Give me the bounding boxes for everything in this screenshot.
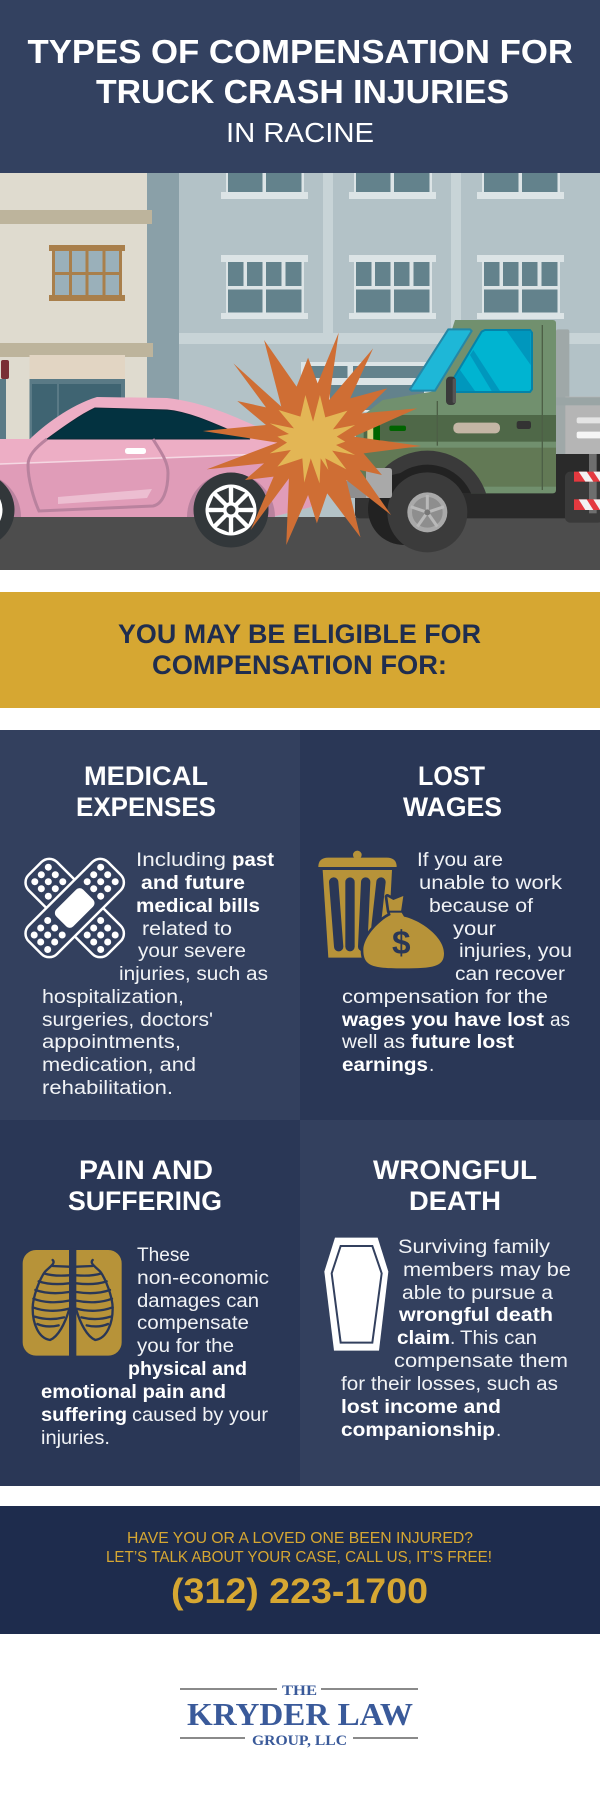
body text: wrongful death: compensate them [394, 1351, 568, 1372]
heading: lost wages: WAGES [403, 792, 502, 822]
title line two: TRUCK CRASH INJURIES [96, 73, 509, 110]
heading: lost wages [403, 761, 502, 822]
body text: pain and suffering: caused by your [132, 1405, 269, 1426]
body text: wrongful death: wrongful death [398, 1305, 553, 1326]
heading: medical expenses: EXPENSES [76, 792, 216, 822]
body text: lost wages: unable to work [419, 873, 563, 894]
logo: The Kryder Law Group: THE [282, 1683, 317, 1699]
eligibility banner [0, 592, 600, 708]
body text: wrongful death: companionship [341, 1420, 495, 1441]
heading: lost wages: LOST [418, 761, 485, 791]
pink car [0, 397, 320, 548]
background buildings [0, 173, 600, 518]
panel: pain and suffering [0, 1120, 300, 1486]
body text: medical expenses: surgeries, doctors' [42, 1010, 213, 1031]
heading: medical expenses: MEDICAL [84, 761, 208, 791]
green truck [355, 320, 600, 574]
heading: medical expenses [76, 761, 216, 822]
panel: lost wages [300, 730, 600, 1120]
heading: pain and suffering: SUFFERING [68, 1186, 222, 1216]
body text: wrongful death [341, 1237, 571, 1441]
banner line one: YOU MAY BE ELIGIBLE FOR [118, 619, 481, 649]
body text: medical expenses: related to [142, 919, 232, 940]
body text: wrongful death: Surviving family [398, 1237, 551, 1258]
call to action text [106, 1530, 492, 1566]
body text: pain and suffering: suffering [41, 1405, 127, 1426]
subtitle: IN RACINE [226, 117, 374, 148]
body text: lost wages: future lost [411, 1032, 515, 1053]
heading: pain and suffering [68, 1155, 222, 1216]
title line one: TYPES OF COMPENSATION FOR [28, 33, 573, 70]
body text: lost wages: compensation for the [342, 987, 548, 1008]
body text: medical expenses: appointments, [42, 1032, 181, 1053]
body text: lost wages: If you are [417, 850, 503, 871]
body text: medical expenses: past [232, 850, 275, 871]
call to action text: HAVE YOU OR A LOVED ONE BEEN INJURED? [127, 1530, 473, 1547]
body text: lost wages: well as [341, 1032, 405, 1053]
call to action text: LET’S TALK ABOUT YOUR CASE, CALL US, IT’S FREE! [106, 1549, 492, 1566]
body text: wrongful death: . [450, 1328, 455, 1349]
phone number: (312) 223-1700 [171, 1572, 428, 1611]
road [0, 517, 600, 570]
body text: pain and suffering [41, 1245, 269, 1449]
panel: medical expenses [0, 730, 300, 1120]
body text: medical expenses: injuries, such as [119, 964, 268, 985]
body text: lost wages: because of [429, 896, 534, 917]
body text: medical expenses: Including [136, 850, 226, 871]
body text: pain and suffering: physical and [128, 1359, 247, 1380]
hero illustration: car and truck crash [0, 173, 600, 574]
body text: pain and suffering: non-economic [137, 1268, 269, 1289]
icon: rear car wheel [0, 472, 14, 548]
icon: truck wheel rim [407, 492, 447, 532]
body text: pain and suffering: compensate [137, 1313, 249, 1334]
body text: pain and suffering: emotional pain and [41, 1382, 226, 1403]
heading: wrongful death: WRONGFUL [373, 1155, 537, 1185]
body text: wrongful death: lost income and [341, 1397, 501, 1418]
body text: pain and suffering: you for the [137, 1336, 234, 1357]
title banner [0, 0, 600, 173]
body text: lost wages: your [453, 919, 497, 940]
body text: lost wages [341, 850, 572, 1076]
body text: lost wages: wages you have lost [341, 1010, 545, 1031]
body text: medical expenses: hospitalization, [42, 987, 184, 1008]
body text: medical expenses: and future [141, 873, 245, 894]
body text: medical expenses [42, 850, 275, 1099]
icon: dollar sign: $ [392, 925, 411, 962]
body text: pain and suffering: damages can [137, 1291, 259, 1312]
body text: wrongful death: This can [460, 1328, 537, 1349]
icon: crossed bandages [21, 854, 128, 962]
body text: lost wages: . [429, 1055, 434, 1076]
body text: medical expenses: your severe [138, 941, 246, 962]
panel: wrongful death [300, 1120, 600, 1486]
icon: trash can and money bag [318, 851, 444, 968]
banner line two: COMPENSATION FOR: [152, 650, 447, 680]
body text: wrongful death: able to pursue a [402, 1283, 553, 1304]
call to action banner [0, 1506, 600, 1634]
body text: lost wages: earnings [342, 1055, 428, 1076]
body text: lost wages: injuries, you [459, 941, 572, 962]
icon: front car wheel [194, 472, 268, 548]
body text: wrongful death: for their losses, such as [341, 1374, 558, 1395]
body text: pain and suffering: injuries. [41, 1428, 110, 1449]
body text: lost wages: can recover [455, 964, 566, 985]
body text: pain and suffering: These [137, 1245, 190, 1266]
icon: rib cage [23, 1248, 122, 1357]
heading: wrongful death [373, 1155, 537, 1216]
body text: medical expenses: medical bills [136, 896, 260, 917]
body text: medical expenses: rehabilitation. [42, 1078, 173, 1099]
body text: wrongful death: . [496, 1420, 501, 1441]
body text: wrongful death: members may be [403, 1260, 571, 1281]
body text: medical expenses: medication, and [42, 1055, 196, 1076]
heading: pain and suffering: PAIN AND [79, 1155, 213, 1185]
logo: The Kryder Law Group: KRYDER LAW [187, 1696, 413, 1732]
icon: coffin [324, 1238, 388, 1351]
body text: wrongful death: claim [397, 1328, 450, 1349]
logo: The Kryder Law Group [180, 1683, 418, 1749]
logo: The Kryder Law Group: GROUP, LLC [252, 1733, 347, 1749]
explosion burst [203, 333, 421, 545]
truck bumper [345, 468, 392, 498]
heading: wrongful death: DEATH [409, 1186, 501, 1216]
body text: lost wages: as [550, 1010, 570, 1031]
